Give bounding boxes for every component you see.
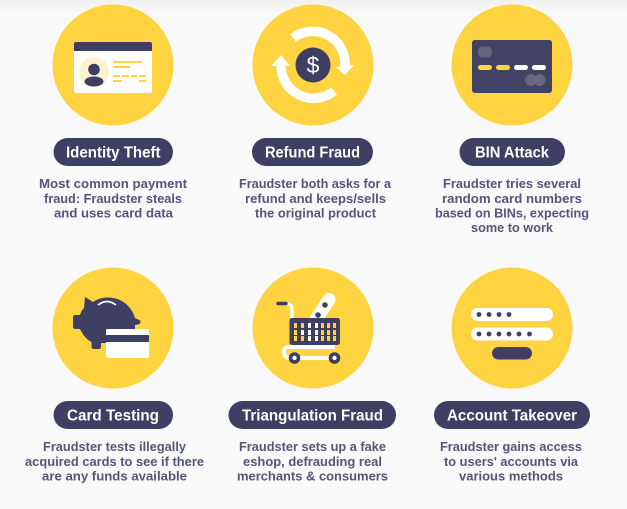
badge: refund fraud [252, 138, 373, 166]
description: refund fraud: the original product [255, 206, 377, 220]
description: identity theft [39, 176, 188, 220]
badge: identity theft [54, 138, 173, 166]
icon: piggy bank and card [52, 268, 174, 388]
panel: triangulation fraud [228, 268, 396, 484]
badge: bin attack [460, 138, 565, 166]
description: triangulation fraud: Fraudster sets up a fake [239, 439, 386, 454]
description: bin attack: some to work [471, 220, 554, 235]
badge: identity theft: Identity Theft [66, 144, 160, 162]
description: triangulation fraud [237, 439, 388, 484]
badge: card testing [54, 401, 173, 429]
icon: login form [452, 268, 572, 388]
description: account takeover: various methods [459, 468, 563, 484]
badge: triangulation fraud [228, 401, 396, 429]
description: identity theft: and uses card data [54, 206, 174, 220]
description: refund fraud: Fraudster both asks for a [239, 176, 392, 191]
description: account takeover [440, 439, 582, 484]
description: account takeover: Fraudster gains access [440, 439, 582, 454]
description: refund fraud: refund and keeps/sells [245, 191, 386, 206]
icon: id card [52, 4, 174, 126]
badge: account takeover: Account Takeover [447, 408, 577, 424]
icon: bank card [452, 4, 572, 126]
description: card testing: acquired cards to see if there [25, 454, 204, 469]
panel: account takeover [434, 268, 590, 484]
description: refund fraud [239, 176, 392, 220]
description: triangulation fraud: merchants & consumers [237, 468, 388, 484]
description: bin attack: random card numbers [442, 191, 582, 206]
description: card testing: are any funds available [42, 468, 187, 484]
description: card testing: Fraudster tests illegally [43, 439, 187, 454]
badge: account takeover [434, 401, 590, 429]
icon: shopping cart [252, 268, 374, 388]
badge: card testing: Card Testing [67, 408, 159, 424]
panel: refund fraud [239, 4, 392, 220]
description: triangulation fraud: eshop, defrauding real [243, 454, 382, 469]
description: bin attack: based on BINs, expecting [435, 206, 589, 220]
icon: refund arrows and dollar [252, 4, 374, 126]
panel: bin attack [435, 4, 589, 235]
description: identity theft: Most common payment [39, 176, 188, 191]
icon: refund arrows and dollar: $ [307, 52, 320, 78]
panel: identity theft [39, 4, 188, 220]
description: identity theft: fraud: Fraudster steals [44, 191, 182, 206]
badge: triangulation fraud: Triangulation Fraud [242, 408, 383, 424]
panel: card testing [25, 268, 204, 484]
badge: refund fraud: Refund Fraud [265, 144, 360, 162]
description: bin attack: Fraudster tries several [443, 176, 581, 191]
description: bin attack [435, 176, 589, 235]
description: card testing [25, 439, 204, 484]
description: account takeover: to users' accounts via [444, 454, 579, 469]
badge: bin attack: BIN Attack [475, 144, 549, 162]
